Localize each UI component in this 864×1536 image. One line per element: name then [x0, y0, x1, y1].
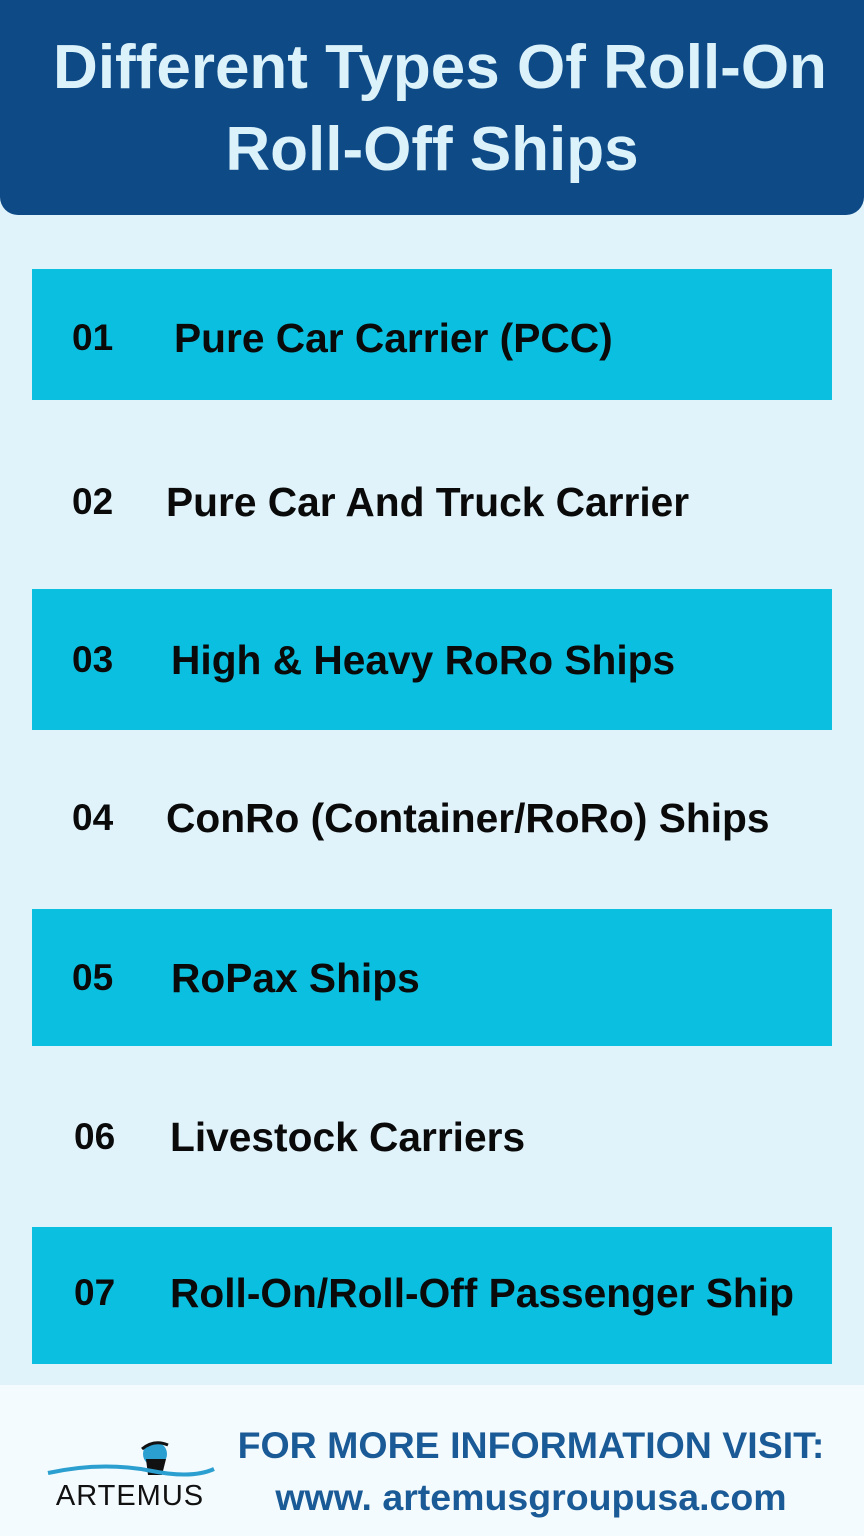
footer text: www. artemusgroupusa.com: [275, 1476, 787, 1518]
item 05: 05: [72, 957, 113, 998]
item 06: Livestock Carriers: [170, 1114, 525, 1160]
item 02: 02: [72, 481, 113, 522]
item 06: 06: [74, 1116, 115, 1157]
item 02: Pure Car And Truck Carrier: [166, 479, 689, 525]
bar: row 7: [32, 1227, 832, 1364]
item 04: 04: [72, 797, 113, 838]
item 03: High & Heavy RoRo Ships: [171, 637, 675, 683]
footer text: [238, 1424, 824, 1518]
logo: artemus: [48, 1441, 215, 1509]
title: Roll-Off Ships: [225, 115, 639, 184]
bar: row 1: [32, 269, 832, 400]
item 01: Pure Car Carrier (PCC): [174, 315, 613, 361]
title: Different Types Of Roll-On: [53, 33, 827, 102]
item 07: 07: [74, 1272, 115, 1313]
item 07: Roll-On/Roll-Off Passenger Ship: [170, 1270, 794, 1316]
header: [0, 0, 864, 215]
footer: [0, 1385, 864, 1536]
item 03: 03: [72, 639, 113, 680]
title: [53, 33, 827, 184]
item 01: 01: [72, 317, 113, 358]
bar: row 3: [32, 589, 832, 730]
item 05: RoPax Ships: [171, 955, 420, 1001]
item 04: ConRo (Container/RoRo) Ships: [166, 795, 769, 841]
footer text: FOR MORE INFORMATION VISIT:: [238, 1424, 824, 1466]
bar: row 5: [32, 909, 832, 1046]
